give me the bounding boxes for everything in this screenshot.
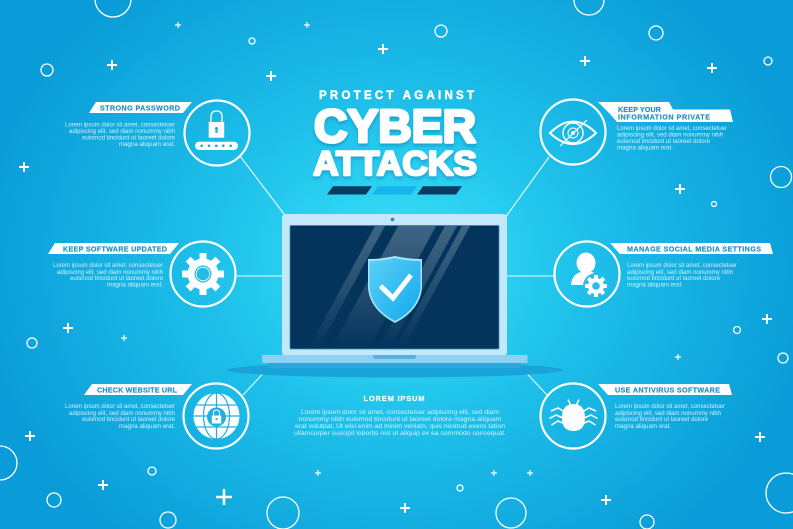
body text: Lorem ipsum dolor sit amet, consectetuer bbox=[65, 403, 175, 410]
title line: attacks: ATTACKS bbox=[313, 145, 477, 183]
laptop ground shadow bbox=[227, 362, 563, 378]
body text: adipiscing elit, sed diam nonummy nibh bbox=[615, 410, 721, 417]
title bbox=[313, 90, 477, 183]
heading: KEEP SOFTWARE UPDATED bbox=[63, 244, 167, 254]
panel: keep software updated bbox=[48, 242, 236, 306]
body text: Lorem ipsum dolor sit amet, consectetuer bbox=[65, 122, 175, 129]
laptop base underside bbox=[268, 363, 522, 368]
body text: nonummy nibh euismod tincidunt ut laoreet dolore magna aliquam bbox=[298, 416, 502, 423]
banner bbox=[89, 102, 192, 113]
panel: strong password bbox=[65, 100, 250, 166]
connector lines bbox=[236, 156, 554, 395]
banner bbox=[598, 102, 733, 122]
title line: protect against: PROTECT AGAINST bbox=[319, 90, 474, 102]
body text: Lorem ipsum dolor sit amet, consectetuer bbox=[617, 125, 727, 132]
panel: use antivirus software bbox=[540, 384, 732, 448]
laptop notch bbox=[373, 355, 416, 359]
banner bbox=[598, 384, 732, 395]
screen bbox=[290, 226, 499, 349]
body text bbox=[65, 122, 176, 148]
panel: keep your information private bbox=[540, 100, 733, 164]
heading: STRONG PASSWORD bbox=[100, 104, 180, 112]
panel: lorem ipsum centre text bbox=[294, 394, 506, 437]
icon: globe with lock bbox=[184, 384, 248, 448]
body text: magna aliquam erat. bbox=[627, 282, 683, 288]
laptop lid bbox=[282, 214, 507, 356]
screen glare bbox=[308, 226, 470, 349]
body text: ullamcorper suscipit lobortis nisl ut aliquip ex ea commodo consequat. bbox=[294, 430, 506, 437]
body text: adipiscing elit, sed diam nonummy nibh bbox=[57, 269, 163, 276]
body text: magna aliquam erat. bbox=[107, 282, 163, 288]
body text bbox=[53, 262, 164, 288]
heading: MANAGE SOCIAL MEDIA SETTINGS bbox=[627, 244, 761, 254]
body text: magna aliquam erat. bbox=[615, 423, 671, 430]
heading: CHECK WEBSITE URL bbox=[97, 386, 178, 394]
body text: euismod tincidunt ut laoreet dolore bbox=[627, 275, 721, 282]
heading: USE ANTIVIRUS SOFTWARE bbox=[615, 386, 720, 394]
icon: bug bbox=[540, 384, 606, 448]
body text: magna aliquam erat. bbox=[119, 423, 175, 430]
body text bbox=[617, 125, 727, 152]
panel: manage social media settings bbox=[554, 242, 773, 306]
body text bbox=[627, 262, 737, 288]
body text: euismod tincidunt ut laoreet dolore bbox=[82, 134, 176, 142]
laptop base bbox=[262, 355, 528, 363]
body text: euismod tincidunt ut laoreet dolore bbox=[617, 138, 711, 145]
body text: adipiscing elit, sed diam nonummy nibh bbox=[627, 269, 733, 276]
title accent bars bbox=[327, 186, 462, 194]
title line: cyber: CYBER bbox=[314, 100, 476, 152]
body text bbox=[65, 403, 176, 430]
body text: euismod tincidunt ut laoreet dolore bbox=[82, 416, 176, 423]
body text bbox=[615, 403, 725, 430]
body text: euismod tincidunt ut laoreet dolore bbox=[615, 416, 709, 423]
panel: check website url bbox=[65, 384, 248, 448]
heading: KEEP YOUR bbox=[618, 105, 662, 114]
laptop bbox=[227, 214, 563, 378]
body text: erat volutpat. Ut wisi enim ad minim veniam, quis nostrud exerci tation bbox=[295, 423, 505, 430]
body text: euismod tincidunt ut laoreet dolore bbox=[70, 275, 164, 282]
body text: adipiscing elit, sed diam nonummy nibh bbox=[69, 410, 175, 417]
body text bbox=[294, 409, 506, 437]
icon: crossed eye bbox=[540, 100, 606, 164]
body text: adipiscing elit, sed diam nonummy nibh bbox=[69, 128, 175, 135]
icon: gear bbox=[170, 242, 236, 306]
body text: Lorem ipsum dolor sit amet, consectetuer bbox=[627, 262, 737, 269]
body text: Lorem ipsum dolor sit amet, consectetuer bbox=[53, 262, 163, 269]
icon: padlock and password bbox=[184, 100, 250, 166]
heading bbox=[618, 105, 710, 122]
body text: adipiscing elit, sed diam nonummy nibh bbox=[617, 132, 723, 138]
camera bbox=[391, 218, 394, 221]
body text: magna aliquam erat. bbox=[617, 144, 673, 152]
banner bbox=[610, 243, 773, 254]
body text: magna aliquam erat. bbox=[119, 141, 175, 148]
icon: person with gear bbox=[554, 242, 620, 306]
heading: LOREM IPSUM bbox=[364, 394, 424, 403]
icon: shield with check bbox=[368, 256, 422, 323]
body text: Lorem ipsum dolor sit amet, consectetuer adipiscing elit, sed diam bbox=[301, 409, 500, 416]
banner bbox=[84, 384, 192, 395]
body text: Lorem ipsum dolor sit amet, consectetuer bbox=[615, 403, 725, 410]
heading: INFORMATION PRIVATE bbox=[618, 112, 710, 122]
banner bbox=[48, 243, 179, 254]
